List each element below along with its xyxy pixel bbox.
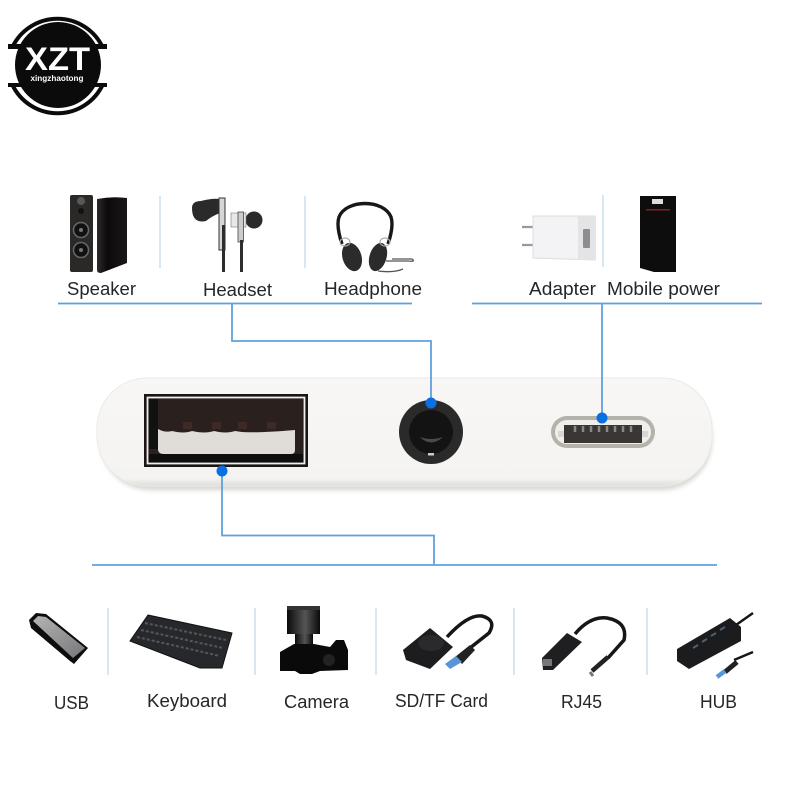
- icon: RJ45 adapter: [542, 618, 625, 676]
- device labels: bottom: Camera: [284, 692, 350, 712]
- device labels: top left: [67, 279, 422, 300]
- device labels: top left: Speaker: [67, 279, 136, 299]
- icon: headphone: [338, 204, 413, 274]
- connector: USB: [92, 466, 717, 565]
- icon: keyboard: [130, 615, 232, 668]
- icon: USB drive: [29, 613, 88, 664]
- connector: audio: [58, 304, 436, 408]
- device labels: top right: Mobile power: [607, 279, 720, 299]
- logo: XZT: XZT: [25, 41, 90, 77]
- device labels: bottom: Keyboard: [147, 691, 227, 711]
- device labels: top right: [529, 279, 720, 299]
- device labels: top right: Adapter: [529, 279, 596, 299]
- adapter shadow: [100, 386, 712, 490]
- device labels: bottom: USB: [54, 693, 89, 713]
- icon: speaker: [70, 195, 127, 273]
- USB port: [144, 394, 308, 467]
- icon: camera: [280, 606, 348, 674]
- logo: XZT: xingzhaotong: [30, 74, 84, 83]
- device labels: bottom: RJ45: [561, 692, 602, 712]
- icon: HUB: [677, 613, 753, 677]
- icon: mobile power: [640, 196, 676, 272]
- icon: SD/TF card reader: [403, 616, 492, 669]
- adapter body: [97, 378, 712, 486]
- logo: XZT: [8, 19, 107, 113]
- icon: headset: [192, 198, 262, 272]
- audio jack: [399, 400, 463, 464]
- connector: charging: [472, 304, 762, 424]
- device labels: bottom: HUB: [700, 692, 737, 712]
- icon: adapter: [522, 216, 596, 260]
- device labels: top left: Headphone: [324, 279, 422, 299]
- divider lines: [108, 195, 647, 675]
- device labels: bottom: SD/TF Card: [395, 691, 488, 711]
- device labels: top left: Headset: [203, 280, 272, 300]
- lightning port: [551, 416, 655, 448]
- device labels: bottom: [54, 691, 737, 713]
